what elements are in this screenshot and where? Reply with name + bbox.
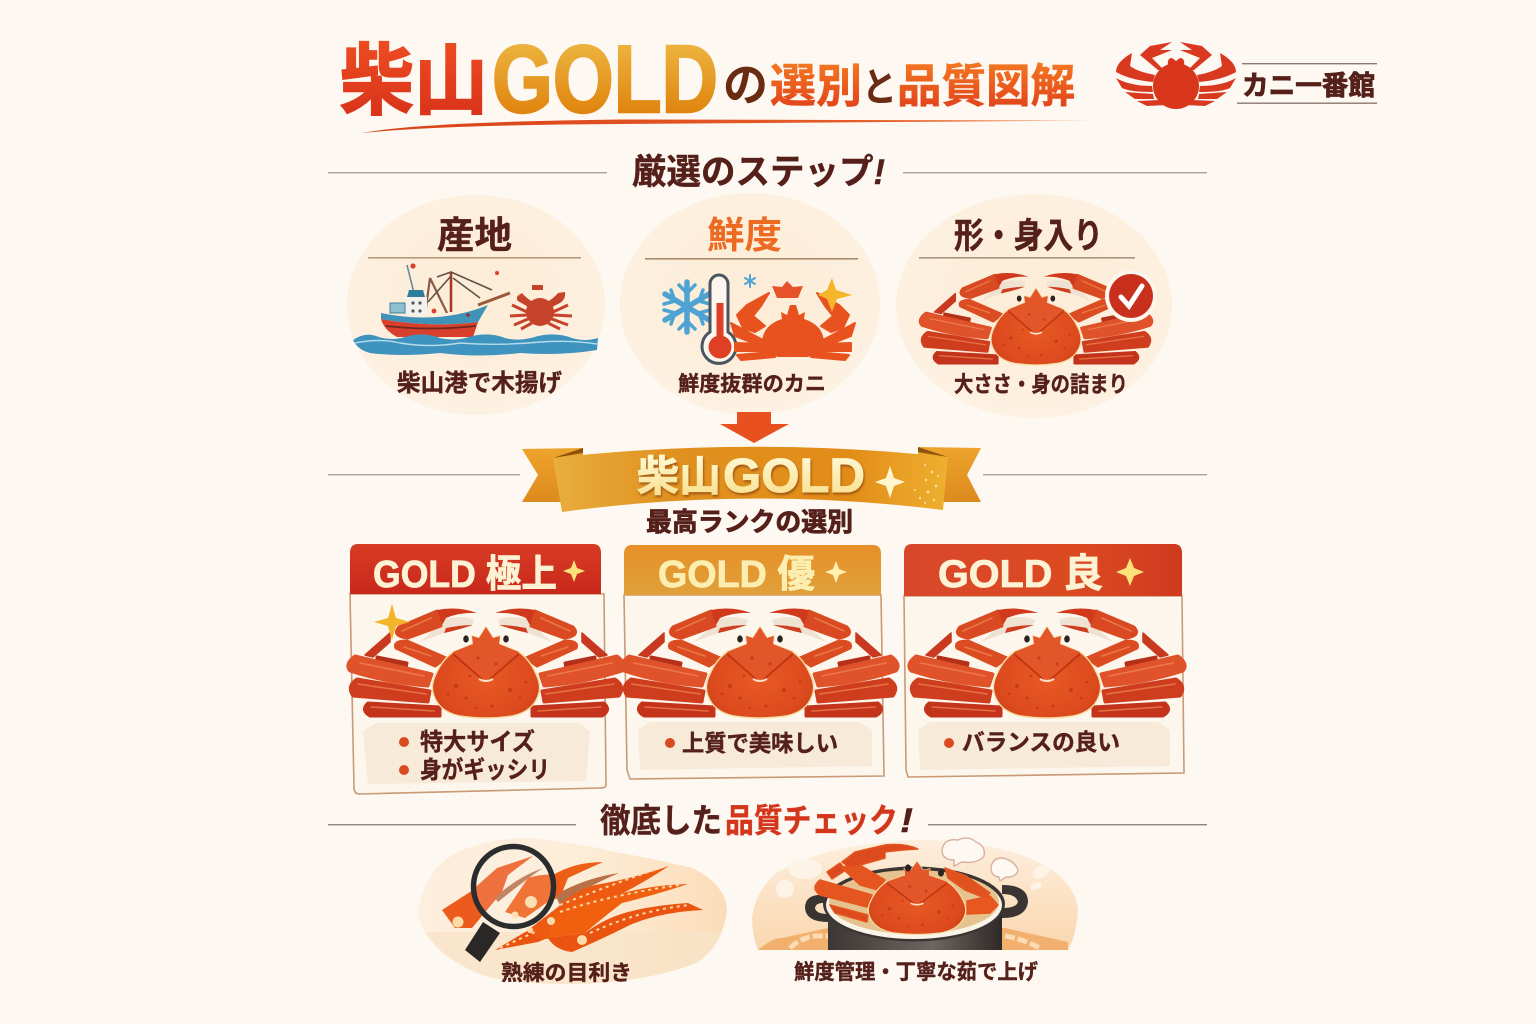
icon: fishing boat xyxy=(381,265,510,337)
heading: 厳選のステップ: 厳選のステップ! xyxy=(632,153,885,192)
panel heading: 形・身入り xyxy=(954,217,1103,256)
steam clouds xyxy=(942,838,1018,881)
panel: 形・身入り xyxy=(896,194,1172,418)
title: 柴山 xyxy=(340,37,488,125)
card heading: GOLD 優 xyxy=(658,554,815,596)
table surface xyxy=(425,932,722,984)
feature list: 身がギッシリ xyxy=(420,756,550,784)
subtitle: 最高ランクの選別: 最高ランクの選別 xyxy=(646,507,853,537)
card heading: GOLD 良 xyxy=(938,553,1103,596)
logo: カニ一番館 xyxy=(1116,42,1377,109)
feature list xyxy=(363,723,590,784)
heading: 徹底した品質チェック: 品質チェック xyxy=(725,802,898,839)
caption: 鮮度管理・丁寧な茹で上げ xyxy=(794,961,1038,984)
card header xyxy=(904,544,1182,596)
icon: star xyxy=(825,561,847,583)
crab in pot xyxy=(815,844,998,934)
caption: 鮮度抜群のカニ xyxy=(678,373,826,396)
icon: logo crab xyxy=(1116,42,1236,109)
icon: star xyxy=(563,560,585,582)
caption: 大ささ・身の詰まり xyxy=(954,372,1128,397)
banner text: GOLD xyxy=(723,450,865,503)
icon: fresh crab xyxy=(731,293,855,360)
title: GOLD xyxy=(492,26,718,133)
crab illustration xyxy=(920,273,1152,365)
counter pattern xyxy=(758,928,1068,950)
gold banner xyxy=(328,447,1207,512)
card header xyxy=(624,545,881,595)
icon: gold star on crab xyxy=(374,604,410,640)
claws under the lens xyxy=(442,856,562,928)
card heading: GOLD 極上 xyxy=(373,554,557,596)
banner sparkle dots xyxy=(914,464,939,504)
banner text xyxy=(637,450,865,503)
title: と xyxy=(862,66,897,110)
feature list xyxy=(918,722,1170,770)
icon: cooking pot xyxy=(805,866,1028,950)
panel: 鮮度管理・丁寧な茹で上げ xyxy=(752,838,1078,984)
icon: check badge xyxy=(1105,270,1157,322)
crab legs illustration xyxy=(495,862,703,952)
card header xyxy=(350,544,601,594)
title xyxy=(340,26,1075,133)
caption: 柴山港で木揚げ xyxy=(397,370,562,397)
heading: 徹底した品質チェック: ! xyxy=(900,802,913,840)
banner text: 柴山 xyxy=(637,453,721,500)
title: 選別 xyxy=(770,60,862,112)
icon: small crab xyxy=(510,285,572,329)
title: 品質図解 xyxy=(897,60,1075,112)
feature list xyxy=(638,722,872,770)
crab illustration xyxy=(909,609,1185,718)
arrow xyxy=(720,412,789,443)
title: の xyxy=(723,59,768,111)
icon: waves xyxy=(353,334,598,356)
icon: thermometer xyxy=(702,275,736,363)
icon: crown xyxy=(772,281,803,298)
panel heading: 産地 xyxy=(437,215,512,256)
icon: gold star xyxy=(818,278,852,312)
feature list: 上質で美味しい xyxy=(682,730,838,756)
heading: 徹底した品質チェック: 徹底した xyxy=(600,802,722,839)
heading: 徹底した品質チェック xyxy=(328,802,1207,840)
banner tails xyxy=(522,447,981,502)
card: GOLD 優 xyxy=(622,545,898,779)
icon: snowflake xyxy=(664,282,710,332)
steam puffs xyxy=(776,859,1052,898)
caption: 熟練の目利き xyxy=(501,962,632,985)
crab illustration xyxy=(622,609,898,718)
icon: sparkle xyxy=(875,466,905,498)
icon: red sparkles xyxy=(410,263,499,275)
panel heading: 鮮度 xyxy=(707,215,782,256)
panel: 鮮度 xyxy=(620,193,880,415)
card: GOLD 極上 xyxy=(348,544,624,794)
icon: small snowflake xyxy=(745,275,755,287)
card: GOLD 良 xyxy=(904,544,1185,777)
feature list: バランスの良い xyxy=(962,729,1120,755)
logo wordmark: カニ一番館 xyxy=(1242,71,1375,101)
crab illustration xyxy=(348,609,624,718)
panel: 産地 xyxy=(347,195,605,415)
feature list: 特大サイズ xyxy=(420,728,535,756)
icon: magnifying glass xyxy=(465,846,554,962)
panel: 熟練の目利き xyxy=(418,838,727,985)
icon: star xyxy=(1116,558,1144,586)
banner ribbon xyxy=(553,447,948,512)
title underline xyxy=(362,120,1095,133)
